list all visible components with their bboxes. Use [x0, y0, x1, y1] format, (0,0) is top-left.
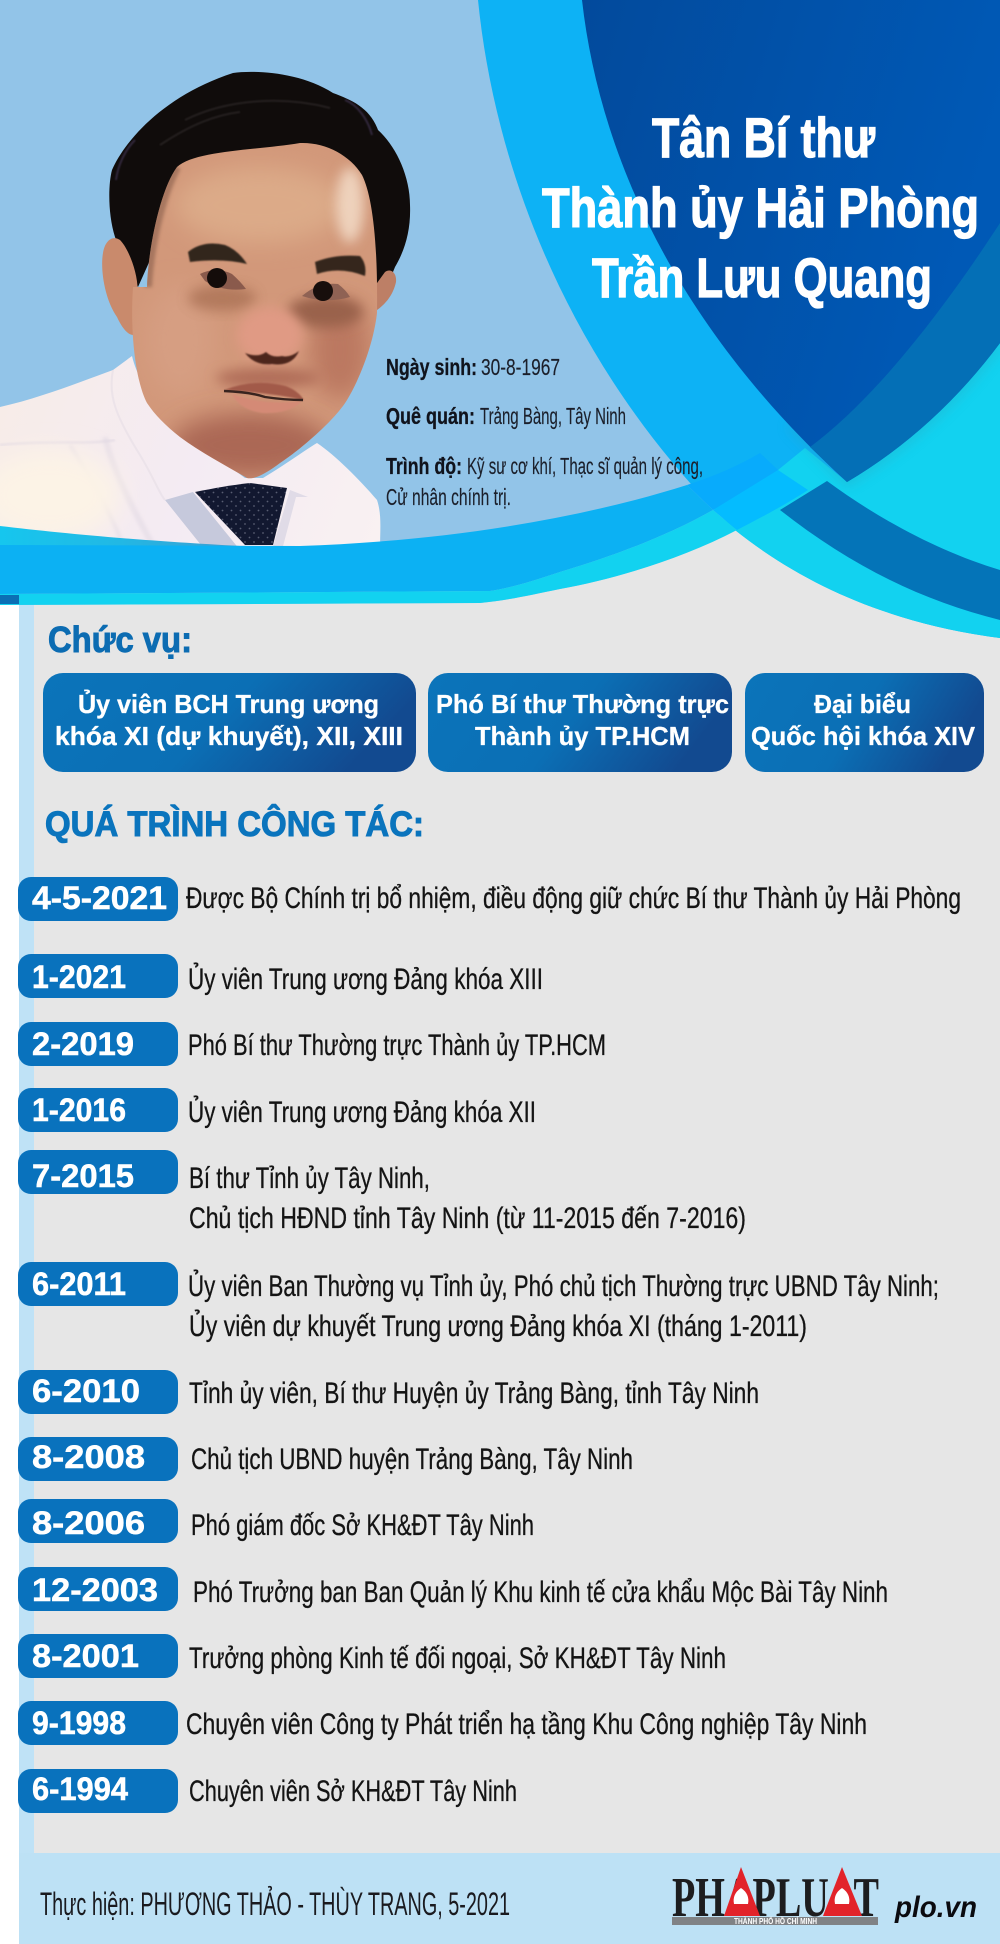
box: national assembly: [745, 673, 984, 772]
row 2-2019: 2-2019: [32, 1026, 134, 1062]
box: deputy secretary: Thành ủy TP.HCM: [475, 721, 690, 751]
left eye: [200, 268, 246, 290]
mid-blue band on navy shape: [810, 223, 1000, 482]
row 7-2015: 7-2015: [32, 1158, 134, 1194]
personal info: [386, 354, 703, 510]
row 6-2011: 6-2011: [32, 1266, 126, 1302]
row 7-2015: [18, 1150, 746, 1235]
heading: career: QUÁ TRÌNH CÔNG TÁC:: [45, 804, 424, 844]
logo subtitle: THÀNH PHỐ HỒ CHÍ MINH: [734, 1916, 817, 1926]
row 6-1994: 6-1994: [32, 1771, 128, 1807]
logo: Pháp Luật: [672, 1867, 879, 1929]
personal info: 30-8-1967: [481, 354, 560, 380]
box: national assembly: Đại biểu: [814, 689, 911, 719]
title: [542, 106, 979, 309]
row 6-2010: Tỉnh ủy viên, Bí thư Huyện ủy Trảng Bàng, tỉnh Tây Ninh: [189, 1377, 759, 1410]
logo wordmark: PHAPLUAT: [672, 1867, 879, 1929]
row 1-2016: 1-2016: [32, 1092, 126, 1128]
left ear: [102, 238, 138, 335]
shirt warm shoulder tone: [0, 450, 120, 540]
row 8-2006: 8-2006: [32, 1505, 145, 1541]
box: central committee: Ủy viên BCH Trung ương: [78, 688, 379, 719]
row 6-2010: [18, 1370, 759, 1414]
footer band: [19, 1853, 1000, 1944]
swoosh overlap light: [713, 470, 808, 530]
heading: positions: Chức vụ:: [48, 619, 192, 660]
right eye: [302, 281, 350, 301]
swoosh bright band: [0, 485, 713, 594]
header background panel: [0, 0, 1000, 638]
right eyebrow: [315, 256, 365, 276]
white margin: [0, 605, 19, 1944]
portrait: [0, 72, 410, 550]
swoosh left wedge: [0, 526, 240, 548]
personal info: Quê quán:: [386, 403, 475, 429]
bright blue arc: [478, 0, 1000, 638]
row 9-1998: 9-1998: [32, 1705, 126, 1741]
shirt front shadow: [165, 492, 240, 550]
title: Tân Bí thư: [652, 106, 875, 169]
row 1-2021: [18, 954, 543, 998]
box: deputy secretary: [428, 673, 732, 772]
row 6-2011: [18, 1262, 939, 1343]
dark blue lower band: [780, 481, 1000, 620]
personal info: Trảng Bàng, Tây Ninh: [480, 403, 626, 429]
row 8-2006: [18, 1499, 534, 1543]
face: [125, 140, 385, 485]
personal info: Ngày sinh:: [386, 354, 477, 380]
row 8-2008: [18, 1437, 633, 1481]
row 7-2015: Chủ tịch HĐND tỉnh Tây Ninh (từ 11-2015 đến 7-2016): [189, 1202, 746, 1235]
box: deputy secretary: Phó Bí thư Thường trực: [436, 689, 729, 719]
row 9-1998: [18, 1701, 867, 1745]
box: national assembly: Quốc hội khóa XIV: [751, 721, 976, 751]
row 8-2008: 8-2008: [32, 1439, 145, 1475]
row 4-5-2021: [18, 877, 961, 921]
row 8-2001: [18, 1634, 726, 1678]
navy title shape: [582, 0, 1000, 482]
bottom swoosh: [0, 453, 808, 1944]
row 6-1994: Chuyên viên Sở KH&ĐT Tây Ninh: [189, 1775, 517, 1808]
row 8-2008: Chủ tịch UBND huyện Trảng Bàng, Tây Ninh: [191, 1443, 633, 1476]
nostrils: [245, 351, 299, 364]
row 6-2011: Ủy viên dự khuyết Trung ương Đảng khóa XI (tháng 1-2011): [189, 1309, 807, 1343]
cyan lower-right shape: [735, 343, 1000, 638]
collar shadow: [272, 490, 308, 550]
right ear: [372, 270, 396, 313]
timeline: [18, 877, 961, 1813]
logo red triangle 1: [724, 1867, 760, 1916]
hair highlights: [116, 100, 372, 180]
shirt shading: [0, 370, 165, 550]
left dark tab: [0, 595, 19, 604]
row 1-2021: Ủy viên Trung ương Đảng khóa XIII: [188, 962, 543, 996]
footer credit: Thực hiện: PHƯƠNG THẢO - THÙY TRANG, 5-2021: [40, 1886, 510, 1922]
position boxes: [43, 673, 984, 772]
box: central committee: khóa XI (dự khuyết), XII, XIII: [55, 721, 403, 751]
shirt: [0, 356, 380, 550]
logo red triangle 2: [823, 1867, 862, 1916]
tie: [195, 483, 287, 545]
row 2-2019: [18, 1022, 606, 1066]
box: central committee: [43, 673, 416, 772]
left accent strip: [19, 600, 34, 1944]
logo grey bar: [672, 1917, 878, 1925]
row 8-2001: Trưởng phòng Kinh tế đối ngoại, Sở KH&ĐT Tây Ninh: [189, 1642, 726, 1675]
soft shadow along navy shape: [790, 343, 1000, 482]
row 8-2001: 8-2001: [32, 1638, 139, 1674]
logo: plo.vn: plo.vn: [894, 1891, 977, 1924]
row 7-2015: Bí thư Tỉnh ủy Tây Ninh,: [189, 1162, 430, 1195]
page background: [34, 500, 1000, 1944]
swoosh cyan band: [0, 510, 737, 605]
row 12-2003: 12-2003: [32, 1572, 158, 1608]
left eyebrow: [188, 244, 247, 264]
row 6-1994: [18, 1769, 517, 1813]
row 8-2006: Phó giám đốc Sở KH&ĐT Tây Ninh: [191, 1509, 534, 1542]
swoosh overlap: [687, 453, 778, 510]
row 1-2016: [18, 1088, 536, 1132]
row 1-2021: 1-2021: [32, 959, 126, 995]
personal info: Kỹ sư cơ khí, Thạc sĩ quản lý công,: [467, 453, 703, 479]
personal info: Trình độ:: [386, 453, 462, 479]
row 12-2003: [18, 1567, 888, 1611]
personal info: Cử nhân chính trị.: [386, 484, 511, 510]
row 6-2010: 6-2010: [32, 1373, 140, 1409]
row 2-2019: Phó Bí thư Thường trực Thành ủy TP.HCM: [188, 1029, 606, 1062]
row 1-2016: Ủy viên Trung ương Đảng khóa XII: [188, 1095, 536, 1129]
hair: [109, 72, 410, 313]
mouth: [224, 383, 304, 413]
row 4-5-2021: 4-5-2021: [32, 880, 167, 916]
